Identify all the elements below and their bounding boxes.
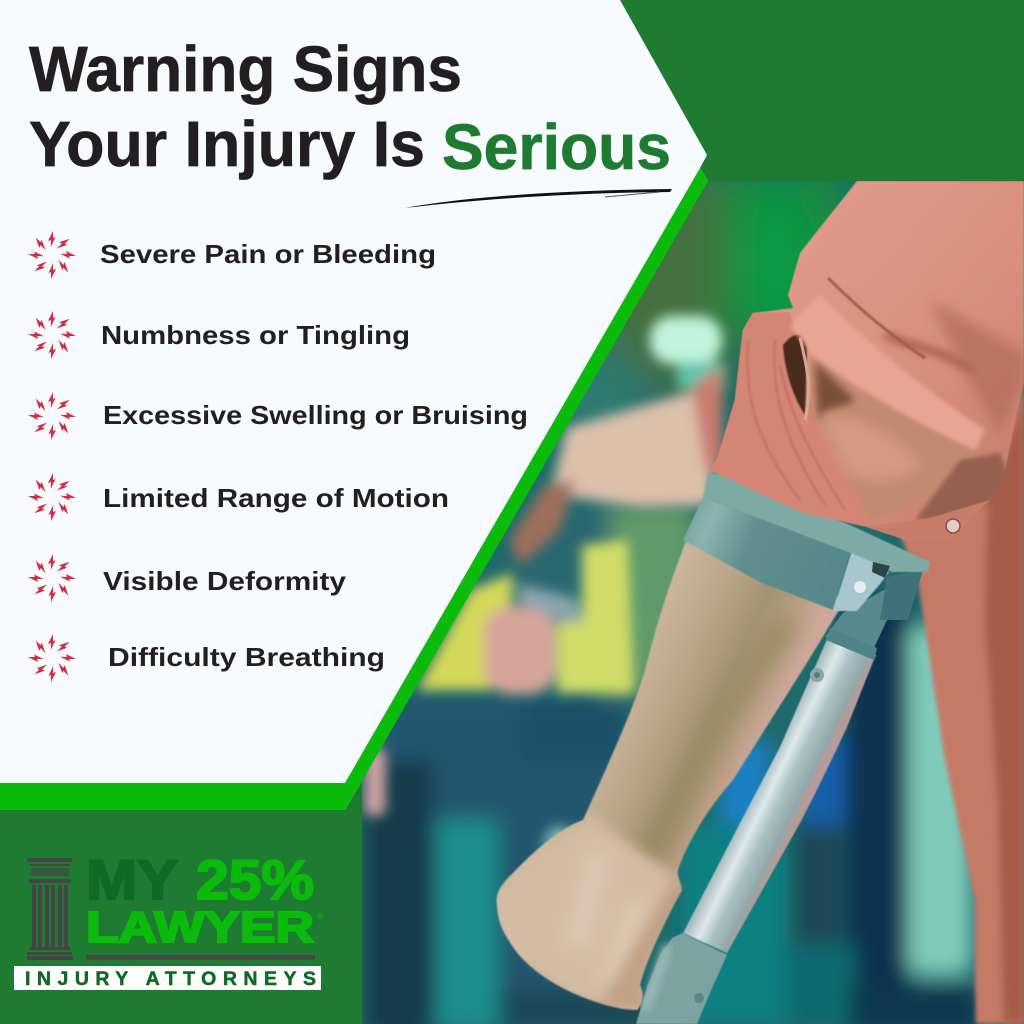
- item: numbness: Numbness or Tingling: [101, 320, 410, 350]
- logo wordmark: MY: MY: [86, 848, 178, 911]
- icon: column: [27, 858, 73, 960]
- forearm and hand: [496, 541, 840, 1011]
- title: [29, 33, 671, 183]
- item: deformity: [28, 554, 347, 602]
- underline stroke: [405, 189, 672, 208]
- crutch bracket: [833, 553, 889, 611]
- sleeve fold highlights: [790, 295, 985, 450]
- logo divider: [86, 955, 315, 960]
- crutch tube: [683, 637, 875, 953]
- item: range of motion: Limited Range of Motion: [103, 483, 449, 513]
- item: numbness: [28, 311, 410, 359]
- pink torso on right: [900, 380, 1024, 1024]
- title highlight word: Serious: [442, 111, 671, 183]
- rolled sleeve: [710, 181, 1024, 542]
- logo tagline box: INJURY ATTORNEYS: [25, 968, 316, 990]
- logo wordmark: LAWYER: LAWYER: [86, 903, 314, 952]
- list: warning signs: [28, 231, 528, 682]
- photo: arm on crutch: [340, 170, 1024, 1024]
- item: breathing: [28, 634, 385, 682]
- arm cuff: [682, 497, 852, 610]
- item: range of motion: [28, 473, 449, 521]
- sleeve pocket shadow: [783, 334, 807, 415]
- item: deformity: Visible Deformity: [103, 566, 347, 596]
- logo registered mark: ®: [317, 912, 323, 921]
- item: swelling: Excessive Swelling or Bruising: [103, 400, 528, 430]
- title line 1: Warning Signs: [29, 33, 462, 105]
- crutch collar and upper joint: [825, 590, 887, 657]
- panel: bottom left green block: [0, 781, 362, 1024]
- title line 2: Your Injury Is: [29, 108, 425, 180]
- crutch grip: [636, 933, 727, 1024]
- item: breathing: Difficulty Breathing: [108, 642, 385, 672]
- rolled cuff right: [915, 453, 1008, 522]
- sleeve cuff fold: [710, 312, 843, 516]
- logo: [14, 848, 323, 990]
- item: swelling: [28, 392, 528, 440]
- accent: bright green diagonal band: [0, 168, 708, 810]
- panel: top right green block: [620, 0, 1024, 181]
- sleeve interior: [810, 356, 990, 522]
- item: severe pain: [28, 231, 436, 279]
- logo wordmark: 25%: 25%: [196, 848, 314, 911]
- item: severe pain: Severe Pain or Bleeding: [100, 239, 436, 269]
